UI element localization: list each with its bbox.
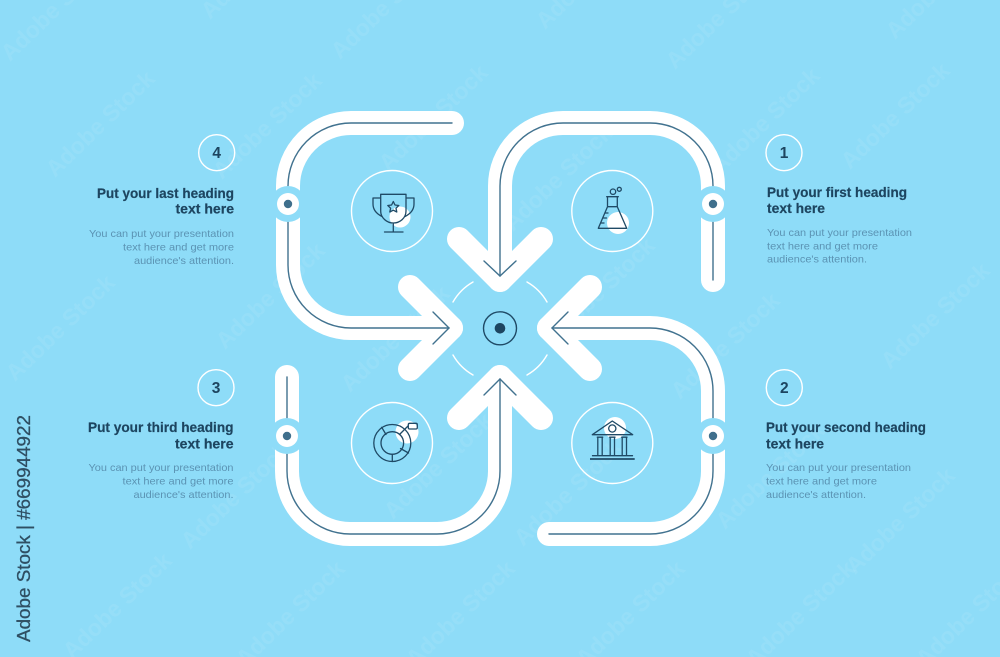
body 1 bbox=[767, 227, 912, 266]
central target bbox=[453, 282, 547, 375]
node 3 bbox=[269, 418, 305, 454]
body 4: text here and get more bbox=[123, 242, 234, 254]
body 1: audience's attention. bbox=[767, 254, 867, 266]
heading 4: Put your last heading bbox=[97, 185, 234, 201]
body 2: You can put your presentation bbox=[766, 462, 911, 474]
body 3: You can put your presentation bbox=[88, 462, 234, 474]
arrow 4: top left loop pointing right bbox=[288, 123, 452, 369]
node 2 bbox=[695, 418, 731, 454]
watermark pattern: Adobe Stock bbox=[175, 437, 295, 554]
number badge 3 bbox=[198, 370, 234, 406]
watermark pattern: Adobe Stock bbox=[710, 417, 830, 534]
body 4: audience's attention. bbox=[134, 255, 234, 267]
watermark pattern: Adobe Stock bbox=[875, 257, 995, 374]
watermark pattern: Adobe Stock bbox=[373, 59, 493, 176]
step 3 text block bbox=[88, 370, 234, 501]
body 3: audience's attention. bbox=[134, 489, 234, 501]
heading 1 bbox=[767, 184, 907, 216]
heading 4 bbox=[97, 185, 234, 217]
watermark pattern: Adobe Stock bbox=[540, 232, 660, 349]
step 1 text block bbox=[766, 135, 912, 266]
body 3: text here and get more bbox=[122, 476, 234, 488]
body 4: You can put your presentation bbox=[89, 228, 234, 240]
icon: bank building bbox=[572, 402, 653, 484]
heading 2: Put your second heading bbox=[766, 419, 926, 435]
watermark pattern: Adobe Stock bbox=[835, 57, 955, 174]
ring arcs bbox=[453, 282, 547, 375]
step 4 text block bbox=[89, 135, 235, 267]
watermark pattern: Adobe Stock bbox=[335, 280, 455, 397]
watermark pattern: Adobe Stock bbox=[665, 287, 785, 404]
arrow 2: bottom right loop pointing left bbox=[549, 287, 713, 534]
node 1 bbox=[695, 186, 731, 222]
heading 1: text here bbox=[767, 200, 825, 216]
heading 2 bbox=[766, 419, 926, 451]
watermark pattern: Adobe Stock bbox=[210, 237, 330, 354]
number badge 4 bbox=[199, 135, 235, 171]
watermark pattern: Adobe Stock bbox=[378, 407, 498, 524]
number badge 2 bbox=[766, 370, 802, 406]
number badge 1: 1 bbox=[780, 145, 789, 162]
node 4 bbox=[270, 186, 306, 222]
watermark pattern: Adobe Stock bbox=[498, 119, 618, 236]
watermark pattern: Adobe Stock bbox=[508, 434, 628, 551]
number badge 1 bbox=[766, 135, 802, 171]
body 4 bbox=[89, 228, 234, 267]
heading 3 bbox=[88, 419, 234, 451]
watermark pattern: Adobe Stock bbox=[705, 62, 825, 179]
stock credit: Adobe Stock | #669944922 bbox=[13, 415, 34, 642]
heading 2: text here bbox=[766, 435, 824, 451]
body 2: audience's attention. bbox=[766, 489, 866, 501]
body 2 bbox=[766, 462, 911, 501]
watermark pattern: Adobe Stock bbox=[0, 269, 120, 386]
heading 4: text here bbox=[176, 201, 234, 217]
icon: donut chart bbox=[352, 402, 432, 484]
body 1: text here and get more bbox=[767, 240, 878, 252]
body 1: You can put your presentation bbox=[767, 227, 912, 239]
watermark pattern: Adobe Stock bbox=[840, 462, 960, 579]
icon: trophy bbox=[352, 170, 432, 252]
step 2 text block bbox=[766, 370, 926, 501]
body 3 bbox=[88, 462, 234, 501]
watermark pattern: Adobe Stock bbox=[40, 65, 160, 182]
arrow 3: bottom left loop pointing up bbox=[287, 377, 541, 534]
number badge 4: 4 bbox=[212, 145, 221, 162]
arrow 1: top right loop pointing down bbox=[459, 123, 713, 280]
heading 3: Put your third heading bbox=[88, 419, 234, 435]
icon: flask bbox=[572, 170, 653, 252]
body 2: text here and get more bbox=[766, 476, 877, 488]
watermark pattern: Adobe Stock bbox=[207, 67, 327, 184]
number badge 3: 3 bbox=[212, 380, 221, 397]
number badge 2: 2 bbox=[780, 380, 789, 397]
heading 3: text here bbox=[175, 435, 234, 451]
heading 1: Put your first heading bbox=[767, 184, 907, 200]
